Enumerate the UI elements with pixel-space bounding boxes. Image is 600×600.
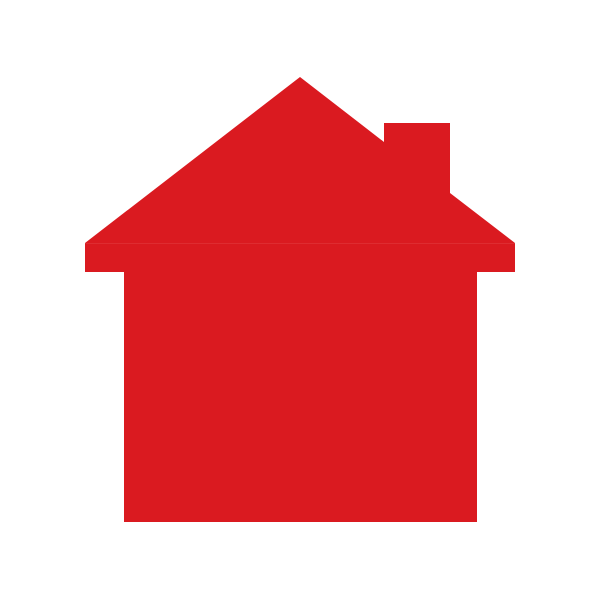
house body [124,272,477,522]
house roof with chimney [85,77,515,243]
roof eave band [85,243,515,272]
